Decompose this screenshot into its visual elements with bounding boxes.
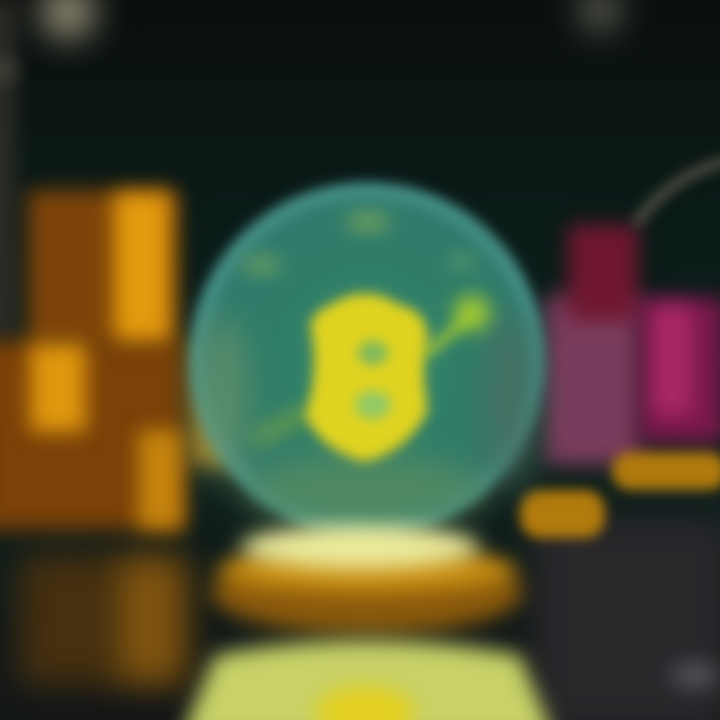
crystal globe	[189, 182, 545, 538]
arc top right	[635, 160, 720, 225]
left dark gray band	[0, 0, 16, 340]
top background lights	[0, 0, 622, 81]
lower right dim area	[535, 520, 720, 720]
right panel: crimson and magenta blocks	[545, 225, 720, 465]
gold rings right	[520, 452, 720, 538]
globe base	[211, 525, 523, 634]
yellow reflection	[180, 640, 555, 720]
gold blocks left	[0, 190, 244, 530]
globe right glass tint	[482, 310, 538, 490]
globe lower glass	[240, 455, 490, 525]
globe left pale glass	[196, 315, 248, 485]
yellow shield	[305, 294, 428, 462]
circuit branches	[255, 295, 490, 440]
globe top markers	[242, 212, 478, 275]
gold reflection lower left	[20, 555, 190, 685]
